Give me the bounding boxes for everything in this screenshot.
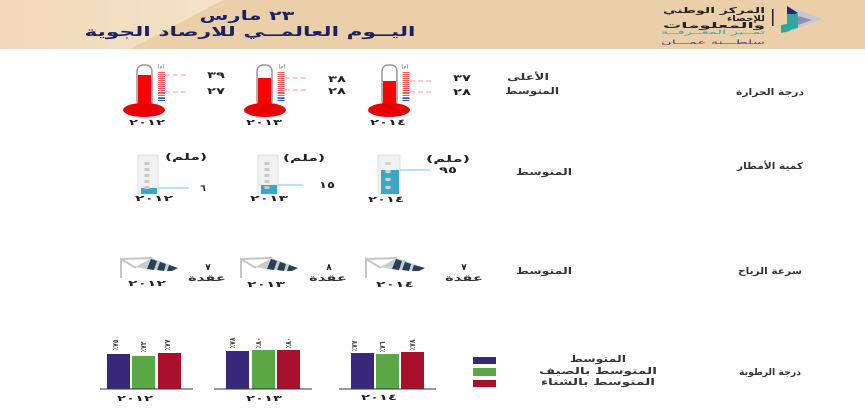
windsock 2012: ٢٠١٢ bbox=[128, 279, 166, 288]
logo: المركز الوطني bbox=[663, 6, 765, 15]
rain gauge 2014: ٢٠١٤ bbox=[368, 195, 404, 204]
windsock 2014: ٢٠١٤ bbox=[376, 280, 414, 289]
thermometer 2013: ٢٨ bbox=[328, 87, 347, 97]
windsock 2014: ٧ bbox=[461, 263, 467, 273]
windsock 2013: ٨ bbox=[326, 263, 332, 273]
bar chart 2013 bbox=[214, 337, 312, 403]
windsock 2014: عقدة bbox=[445, 274, 483, 284]
bar chart 2014: ٧٦٪ bbox=[378, 341, 387, 352]
bar chart 2012: ٧٥٪ bbox=[111, 339, 120, 350]
logo: سلطـــنة عمـــان bbox=[661, 39, 765, 46]
bar chart 2013: ٧٨٪ bbox=[228, 337, 237, 348]
humidity legend: المتوسط بالصيف bbox=[539, 367, 657, 377]
rainfall average label: المتوسط bbox=[516, 168, 572, 178]
bar chart 2014: ٧٧٪ bbox=[350, 340, 359, 352]
bar chart 2014 bbox=[339, 339, 436, 402]
windsock 2013 bbox=[241, 258, 347, 289]
bar chart 2012: ٧٧٪ bbox=[163, 339, 172, 350]
rain gauge 2014: ٩٥ bbox=[439, 166, 457, 176]
bar chart 2013: ٨٠٪ bbox=[284, 338, 293, 348]
row labels: highest and average: الأعلى bbox=[507, 71, 549, 83]
rain gauge 2013 bbox=[250, 154, 335, 203]
humidity legend: المتوسط bbox=[570, 355, 626, 365]
humidity legend bbox=[473, 355, 657, 388]
rain gauge 2012: ٦ bbox=[200, 184, 206, 194]
rain gauge 2013: ٢٠١٣ bbox=[250, 194, 288, 203]
humidity legend: المتوسط بالشتاء bbox=[541, 378, 655, 388]
thermometer 2014: ٢٨ bbox=[453, 88, 472, 98]
thermometer 2013 bbox=[244, 64, 347, 127]
rain gauge 2014 bbox=[368, 155, 470, 204]
row label: wind speed: سرعة الرياح bbox=[738, 267, 802, 277]
rain gauge 2012: (ملم) bbox=[165, 153, 207, 163]
rain gauge 2013: ١٥ bbox=[319, 181, 335, 191]
logo bbox=[661, 6, 823, 46]
rain gauge 2013: (ملم) bbox=[283, 154, 325, 164]
thermometer 2012 bbox=[123, 64, 226, 127]
thermometer 2012: ٣٩ bbox=[207, 71, 226, 81]
windsock 2013: ٢٠١٣ bbox=[247, 280, 285, 289]
windsock 2012 bbox=[121, 258, 226, 288]
title bbox=[84, 9, 416, 40]
thermometer 2014: (م) bbox=[402, 64, 409, 70]
logo: تمــيز المعــرفــة bbox=[661, 29, 766, 36]
bar chart 2013: ٨٠٪ bbox=[254, 338, 263, 348]
row labels: highest and average: المتوسط bbox=[505, 87, 559, 97]
rain gauge 2014: (ملم) bbox=[426, 155, 470, 165]
windsock 2013: عقدة bbox=[309, 274, 347, 284]
row labels: highest and average bbox=[505, 71, 559, 97]
bar chart 2012: ٧٢٪ bbox=[139, 341, 148, 352]
bar chart 2014: ٢٠١٤ bbox=[361, 393, 397, 402]
title: ٢٣ مارس bbox=[200, 9, 295, 24]
windsock 2012: عقدة bbox=[188, 274, 226, 284]
bar chart 2013: ٢٠١٣ bbox=[246, 394, 282, 403]
rain gauge 2012: ٢٠١٢ bbox=[135, 194, 173, 203]
logo: والمعلومات bbox=[663, 21, 765, 30]
thermometer 2013: (م) bbox=[278, 64, 286, 70]
row label: rainfall: كمية الأمطار bbox=[736, 160, 804, 172]
windsock 2014 bbox=[366, 258, 483, 289]
logo: للإحصاء bbox=[727, 14, 765, 23]
rain gauge 2012 bbox=[135, 153, 207, 203]
thermometer 2013: ٢٠١٣ bbox=[246, 118, 282, 127]
thermometer 2012: ٢٧ bbox=[207, 87, 226, 97]
thermometer 2013: ٣٨ bbox=[328, 75, 347, 85]
header band bbox=[0, 0, 865, 49]
thermometer 2014 bbox=[368, 64, 472, 127]
bar chart 2012: ٢٠١٢ bbox=[117, 394, 153, 403]
bar chart 2014: ٧٨٪ bbox=[408, 339, 417, 350]
row label: temperature: درجة الحرارة bbox=[736, 88, 804, 98]
thermometer 2012: (م) bbox=[158, 64, 165, 70]
thermometer 2012: ٢٠١٢ bbox=[129, 118, 165, 127]
thermometer 2014: ٣٧ bbox=[453, 74, 472, 84]
wind average label: المتوسط bbox=[516, 267, 572, 277]
thermometer 2014: ٢٠١٤ bbox=[370, 118, 406, 127]
windsock 2012: ٧ bbox=[205, 263, 211, 273]
bar chart 2012 bbox=[100, 339, 193, 403]
row label: humidity: درجة الرطوبة bbox=[739, 368, 801, 378]
title: اليــوم العالمــي للارصاد الجوية bbox=[84, 25, 416, 40]
